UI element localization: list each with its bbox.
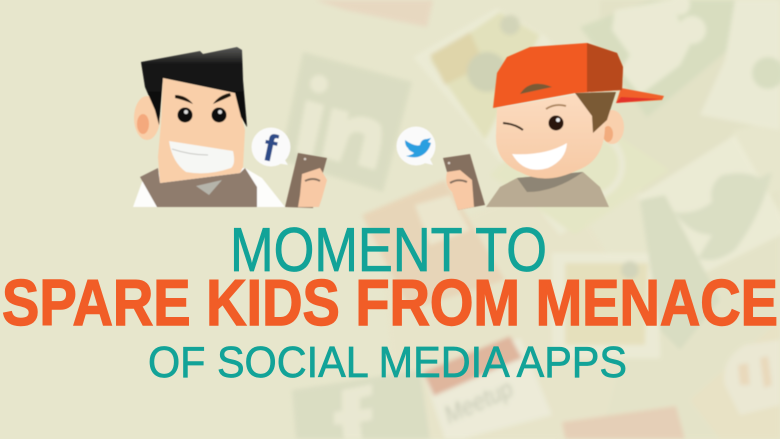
icon: meetup tile: Meetup — [440, 375, 517, 429]
speech bubble: facebook: f — [259, 127, 281, 171]
phone — [443, 154, 485, 210]
speech bubble: twitter — [396, 126, 436, 166]
icon: salmon tile behind heading — [362, 180, 505, 310]
eyes — [178, 108, 226, 122]
speech bubble: facebook — [252, 127, 290, 171]
icon: yellow tile behind boy — [490, 100, 670, 235]
icon: meetup tile — [423, 336, 552, 439]
eyebrows — [175, 93, 231, 104]
winking eye — [503, 123, 523, 130]
collar — [196, 180, 222, 195]
ear — [600, 110, 624, 144]
icon: linkedin tile — [280, 52, 412, 192]
heading line 1: MOMENT TO — [230, 216, 547, 285]
smile — [512, 143, 567, 170]
open eye — [548, 116, 564, 130]
icon: right tile — [700, 0, 780, 130]
hair — [575, 92, 616, 133]
hand — [298, 168, 327, 207]
icon: twitter tile — [637, 135, 780, 275]
eyebrow — [546, 105, 566, 109]
icon: red tile bottom — [562, 406, 685, 439]
neckline — [517, 172, 583, 192]
icon: pink tile top — [315, 0, 433, 27]
vest — [140, 168, 257, 207]
hair — [141, 47, 247, 127]
icon: orange tile bottom right — [690, 320, 780, 439]
icon: bottom instagram tile — [552, 253, 660, 358]
visor — [616, 88, 664, 103]
title — [2, 216, 778, 387]
hand — [446, 170, 474, 210]
face — [158, 78, 245, 183]
icon: instagram tile — [413, 8, 640, 235]
shirt — [133, 168, 285, 207]
icon: green tile — [580, 0, 760, 117]
heading line 3: OF SOCIAL MEDIA APPS — [148, 338, 627, 387]
cap — [493, 43, 623, 108]
icon: diagonal strip — [640, 195, 720, 350]
faded app icon collage — [280, 0, 780, 439]
shirt — [486, 172, 609, 207]
icon: facebook tile — [292, 370, 430, 439]
character: man with phone — [133, 47, 327, 208]
character: boy with cap — [396, 43, 664, 210]
grin — [169, 141, 234, 173]
face — [496, 92, 605, 179]
cap opening — [520, 84, 552, 94]
phone — [285, 153, 327, 208]
ear — [134, 96, 160, 140]
